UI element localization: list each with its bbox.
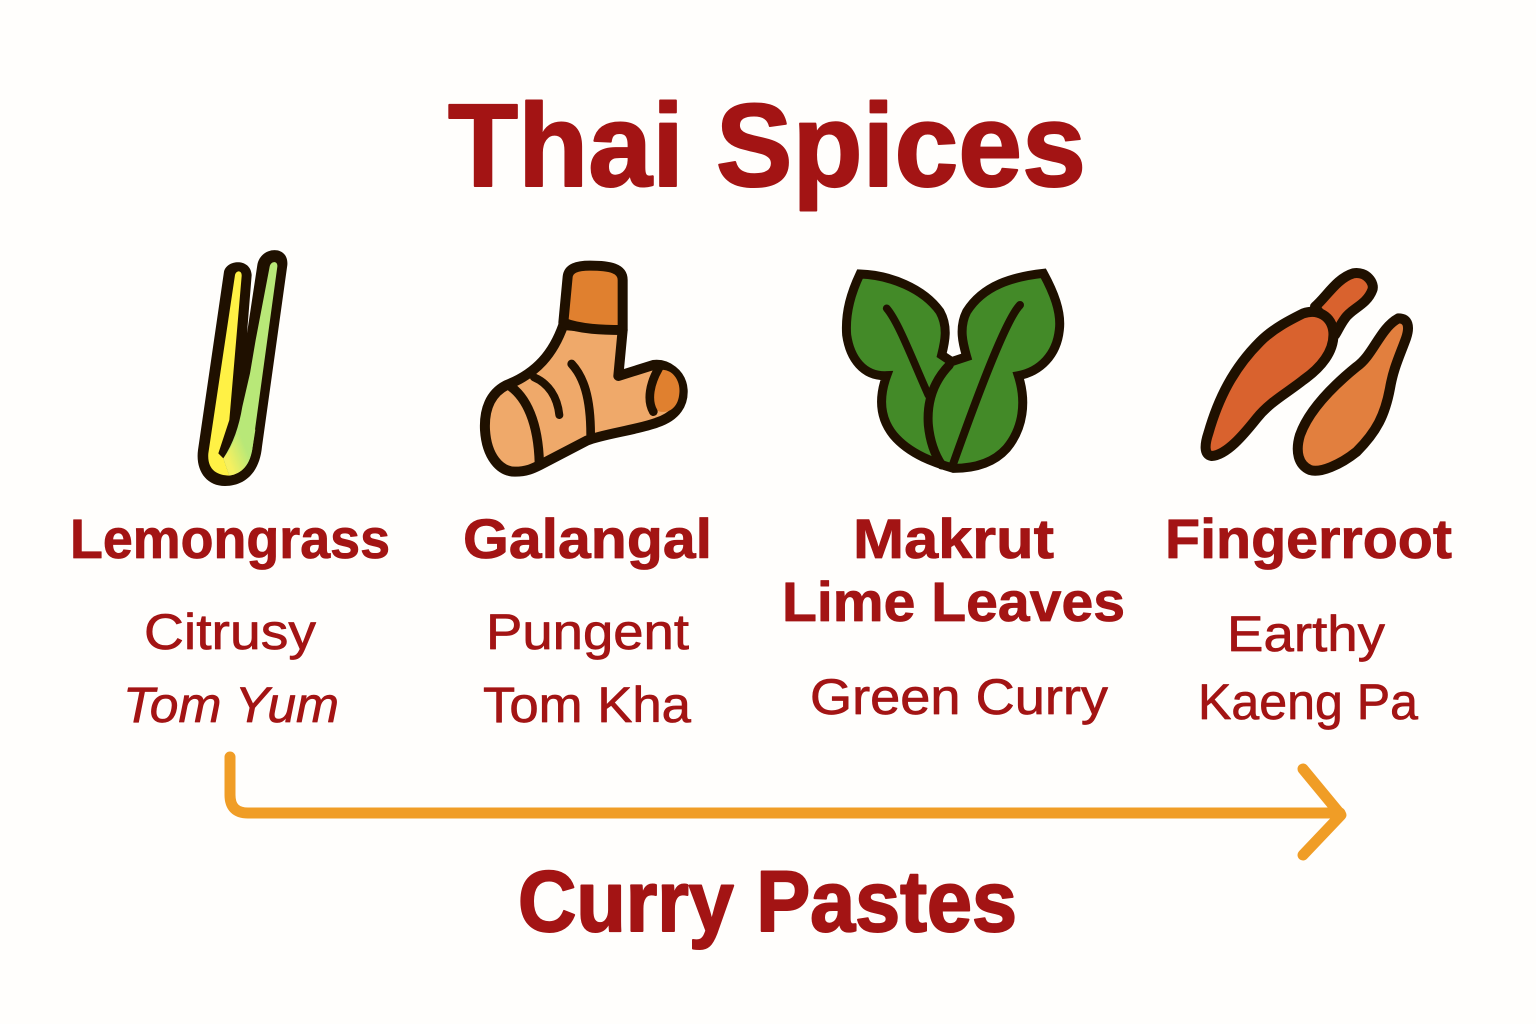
label: Lemongrass: Lemongrass [70,507,390,570]
title: Thai Spices [448,80,1086,212]
icon: fingerroot [1206,273,1408,471]
icon: galangal [485,266,683,472]
icon: lemongrass [198,250,287,486]
panel: Makrut Lime Leaves [782,273,1125,725]
panel: Galangal [463,266,712,733]
dish: Kaeng Pa: Kaeng Pa [1198,674,1418,730]
label: Makrut Lime Leaves [782,507,1125,633]
label: Makrut Lime Leaves: Makrut [853,507,1054,570]
panel: Lemongrass [70,250,390,733]
dish: Tom Kha: Tom Kha [483,677,691,733]
label: Fingerroot: Fingerroot [1165,507,1452,570]
arrow [230,757,1341,855]
dish: Tom Yum: Tom Yum [123,677,339,733]
label: Makrut Lime Leaves: Lime Leaves [782,570,1125,633]
panel: Fingerroot [1165,273,1452,730]
flavor: Citrusy: Citrusy [144,604,316,660]
dish: Green Curry: Green Curry [810,669,1108,725]
flavor: Earthy: Earthy [1227,606,1385,662]
label: Galangal: Galangal [463,507,712,570]
footer label: Curry Pastes: Curry Pastes [518,854,1017,950]
flavor: Pungent: Pungent [486,604,689,660]
icon: makrut lime leaves [846,273,1060,468]
